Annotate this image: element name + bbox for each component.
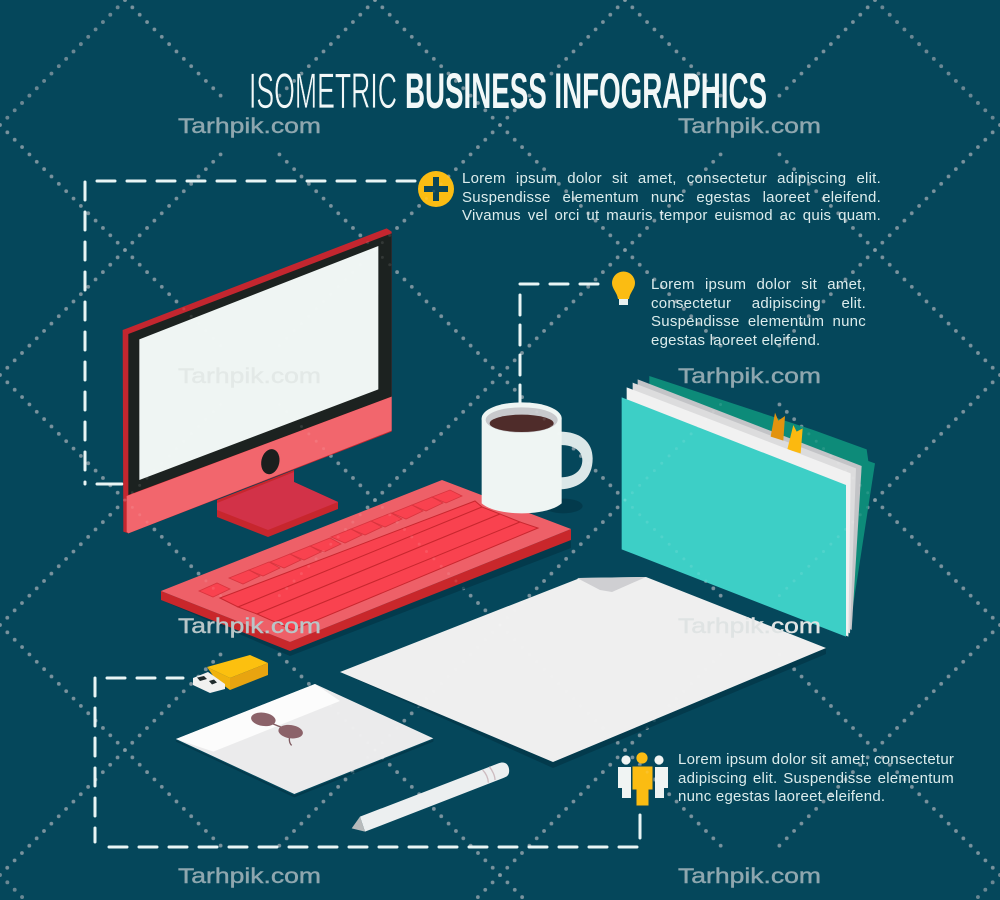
envelope and pen: [176, 684, 509, 832]
folder front: [622, 397, 846, 637]
monitor frame: [123, 228, 392, 533]
text block: middle paragraph: consectetur adipiscing elit.: [651, 294, 866, 312]
folder: [622, 376, 875, 637]
keyboard side: [161, 529, 571, 651]
paper fold: [577, 577, 646, 592]
watermarks: [178, 115, 821, 888]
text block: middle paragraph: [651, 276, 866, 348]
monitor: [123, 228, 392, 533]
usb body front: [207, 667, 230, 690]
paper shadow: [340, 648, 826, 768]
bookmark orange: [771, 413, 785, 441]
pen: [352, 762, 509, 832]
text block: middle paragraph: Suspendisse elementum nunc: [651, 313, 866, 330]
watermarks: Tarhpik.com: [178, 365, 321, 388]
text block: top paragraph: Vivamus vel orci ut mauris tempor euismod ac quis quam.: [462, 207, 881, 224]
usb drive: [193, 655, 268, 693]
text block: bottom paragraph: Lorem ipsum dolor sit amet, consectetur: [678, 751, 954, 768]
icon: team of people: [618, 752, 668, 806]
keyboard: [161, 480, 571, 656]
keyboard top: [161, 480, 571, 642]
watermarks: Tarhpik.com: [678, 365, 821, 388]
keyboard rows: [220, 501, 538, 630]
monitor screen: [139, 246, 378, 480]
connector: monitor dashed line: [85, 181, 418, 484]
bookmark yellow: [787, 425, 803, 453]
text block: bottom paragraph: [678, 751, 954, 805]
watermarks: Tarhpik.com: [178, 865, 321, 888]
text block: middle paragraph: egestas laoreet eleifend.: [651, 332, 820, 348]
watermarks: Tarhpik.com: [678, 615, 821, 638]
monitor chin: [127, 397, 392, 533]
title: [249, 63, 767, 119]
mug interior: [486, 407, 558, 433]
coffee mug: [482, 402, 593, 513]
text block: bottom paragraph: adipiscing elit. Suspendisse elementum: [678, 770, 954, 786]
monitor camera: [259, 447, 282, 476]
text block: top paragraph: Suspendisse elementum nunc egestas laoreet eleifend.: [462, 188, 881, 206]
icon: light bulb: [612, 272, 635, 305]
usb metal connector: [193, 672, 225, 693]
paper body: [340, 577, 826, 762]
paper sheet: [340, 577, 826, 768]
folder page two: [633, 383, 856, 633]
monitor stand: [217, 470, 338, 537]
monitor bezel: [128, 233, 392, 495]
title light part: ISOMETRIC: [249, 63, 397, 119]
watermarks: Tarhpik.com: [678, 865, 821, 888]
folder back: [649, 376, 875, 637]
usb body side: [230, 663, 268, 690]
text block: bottom paragraph: nunc egestas laoreet eleifend.: [678, 788, 885, 805]
text block: top paragraph: [462, 170, 881, 224]
usb connector holes: [197, 676, 217, 684]
watermarks: Tarhpik.com: [178, 115, 321, 138]
connector: usb and team dashed line: [95, 678, 640, 847]
coffee: [490, 415, 554, 432]
mug shadow: [544, 499, 583, 513]
mug handle: [560, 432, 593, 489]
folder page three: [638, 379, 862, 630]
watermarks: Tarhpik.com: [678, 115, 821, 138]
watermarks: Tarhpik.com: [178, 615, 321, 638]
folder page one: [627, 387, 851, 637]
usb body top: [207, 655, 268, 678]
connector: coffee mug dashed line: [520, 284, 598, 405]
icon: plus: [418, 171, 454, 207]
text block: middle paragraph: Lorem ipsum dolor sit amet,: [651, 276, 866, 293]
mug body: [482, 418, 562, 513]
keyboard shadow: [161, 540, 571, 656]
text block: top paragraph: Lorem ipsum dolor sit amet, consectetur adipiscing elit.: [462, 170, 881, 187]
keyboard function keys: [199, 490, 462, 597]
mug rim: [482, 402, 562, 434]
envelope: [176, 684, 433, 797]
